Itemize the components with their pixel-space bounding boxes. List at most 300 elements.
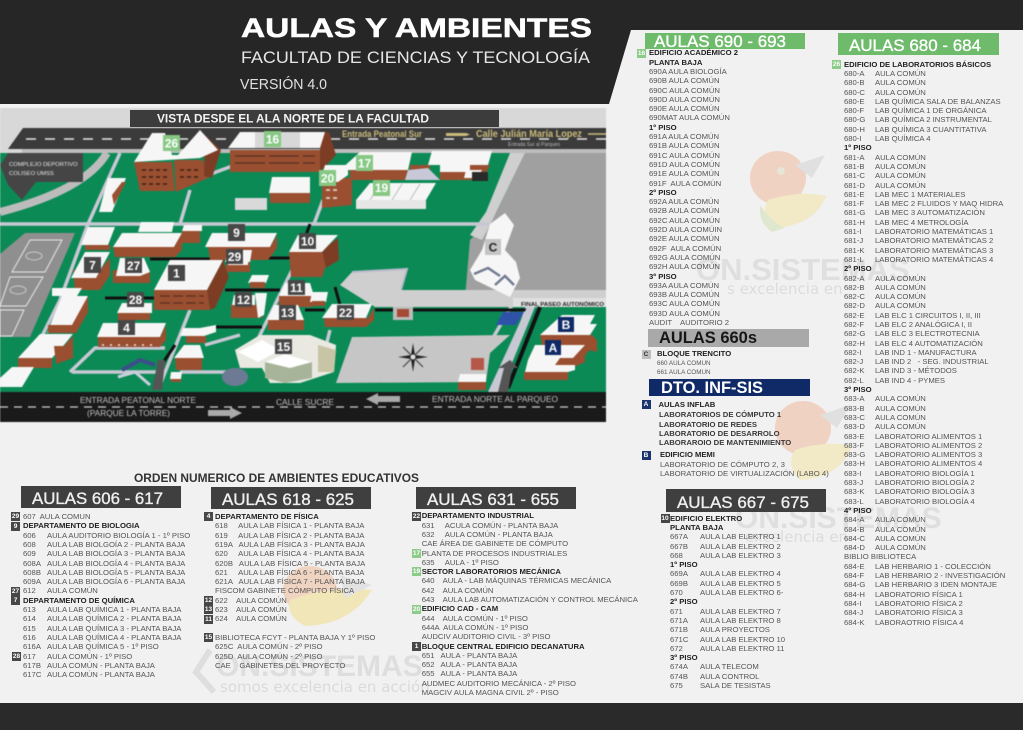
- list: aulas 690-693: 691C AULA COMÚN: [649, 151, 720, 160]
- list: aulas 667-675: 671C: [670, 635, 688, 644]
- list: aulas 618-625: 625C AULA COMÚN - 2º PISO: [215, 642, 322, 651]
- list: aulas 680-684: 681-E: [844, 190, 865, 199]
- header: aulas 631-655: AULAS 631 - 655: [427, 490, 559, 509]
- list: aulas 606-617: 609A: [23, 577, 41, 586]
- list: aulas 680-684: AULA COMÚN: [875, 422, 926, 431]
- badge 22: [412, 512, 421, 520]
- list: aulas 680-684: AULA COMÚN: [875, 171, 926, 180]
- list: aulas 680-684: 683-J: [844, 478, 863, 487]
- small pavilions: [235, 198, 267, 210]
- marker 20: 20: [321, 172, 334, 186]
- badge A: A: [644, 400, 648, 408]
- list: aulas 631-655: SECTOR LABORATORIOS MECÁNICA: [422, 567, 561, 576]
- list: aulas 680-684: [844, 60, 1005, 626]
- west buildings: [0, 288, 88, 387]
- list: aulas 680-684: LAB IND 1 - MANUFACTURA: [875, 348, 977, 357]
- list: aulas 680-684: LAB ELC 2 ANALÓGICA I, II: [875, 320, 972, 329]
- list: aulas 618-625: 624 AULA COMÚN: [215, 614, 287, 623]
- center low building: [269, 177, 310, 203]
- list: aulas 606-617: AULA LAB QUÍMICA 4 - PLANTA BAJA: [47, 633, 181, 642]
- small hut: [248, 275, 269, 288]
- list: aulas 680-684: 682-K: [844, 366, 865, 375]
- list: aulas 680-684: LABORATORIO BIOLOGÍA 3: [875, 487, 975, 496]
- list: aulas 680-684: LAB MEC 1 MATERIALES: [875, 190, 965, 199]
- list: aulas 660s: BLOQUE TRENCITO: [657, 349, 731, 358]
- list: aulas 680-684: 683-L: [844, 497, 864, 506]
- list: aulas 690-693: 3º PISO: [649, 272, 677, 281]
- marker 4: 4: [123, 321, 130, 335]
- marker B: [558, 317, 574, 332]
- list: aulas 680-684: AULA COMÚN: [875, 292, 926, 301]
- list: aulas 680-684: 681-J: [844, 236, 863, 245]
- list: aulas 606-617: AULA LAB BIOLOGÍA 3 - PLANTA BAJA: [47, 549, 185, 558]
- badge 17: 17: [413, 550, 420, 557]
- parking area: [465, 153, 606, 298]
- list: aulas 690-693: 691A AULA COMÚN: [649, 132, 719, 141]
- list: aulas 690-693: 693A AULA COMÚN: [649, 281, 719, 290]
- list: aulas 667-675: 670: [670, 588, 683, 597]
- list: aulas 680-684: AULA COMÚN: [875, 88, 926, 97]
- list: aulas 667-675: 667A: [670, 532, 688, 541]
- list: aulas 606-617: AULA COMÚN - PLANTA BAJA: [47, 670, 155, 679]
- list: aulas 680-684: AULA COMÚN: [875, 404, 926, 413]
- list: aulas 680-684: AULA COMÚN: [875, 274, 926, 283]
- road labels: ENTRADA PEATONAL NORTE: [80, 395, 196, 405]
- list: aulas 680-684: LABORATORIO ALIMENTOS 1: [875, 432, 982, 441]
- compass: [398, 343, 428, 372]
- list: aulas 618-625: 619 AULA LAB FÍSICA 2 - PLANTA BAJA: [215, 531, 364, 540]
- badge C: [642, 350, 650, 358]
- list: aulas 680-684: 2º PISO: [844, 264, 872, 273]
- list: aulas 631-655: MAGCIV AULA MAGNA CIVIL 2º - PISO: [422, 688, 559, 697]
- list: aulas 680-684: LABORATORIO FÍSICA 1: [875, 590, 963, 599]
- list: aulas 690-693: 691F AULA COMÚN: [649, 179, 721, 188]
- watermark: brand bottom: ON.SISTEMAS: [216, 650, 423, 683]
- list: aulas 690-693: 690D AULA COMÚN: [649, 95, 720, 104]
- building row north: [81, 222, 202, 257]
- badge 9: 9: [14, 522, 17, 530]
- top road labels: [342, 128, 606, 148]
- list: laboratorios inflab: LABORATORIO DE DESARROLO: [659, 429, 780, 438]
- marker 26: [163, 135, 180, 151]
- list: aulas 690-693: 2º PISO: [649, 188, 677, 197]
- list: aulas 618-625: 621 AULA LAB FÍSICA 6 - PLANTA BAJA: [215, 568, 364, 577]
- arrow sign: complejo deportivo: COMPLEJO DEPORTIVO: [9, 162, 78, 168]
- badge 19: [412, 567, 421, 576]
- marker 26: 26: [165, 136, 178, 150]
- list: aulas 680-684: 684-A: [844, 515, 865, 524]
- list: aulas 631-655: 631 ACULA COMÚN - PLANTA BAJA: [422, 521, 558, 530]
- list: aulas 680-684: LAB IND 4 - PYMES: [875, 376, 945, 385]
- list: aulas 606-617: AULA COMÚN - PLANTA BAJA: [47, 661, 155, 670]
- arrow sign: complejo deportivo: [0, 153, 83, 200]
- list: aulas 606-617: 609: [23, 549, 36, 558]
- list: aulas 660s: [657, 349, 731, 376]
- marker C: C: [489, 240, 498, 254]
- list: aulas 690-693: 691B AULA COMÚN: [649, 141, 720, 150]
- badge 16: 16: [638, 50, 645, 56]
- list: aulas inflab: AULAS INFLAB: [658, 400, 715, 409]
- marker 11: 11: [290, 281, 303, 295]
- list: aulas 606-617: AULA LAB BIOLOGÍA 6 - PLANTA BAJA: [47, 577, 185, 586]
- list: aulas 667-675: AULA CONTROL: [700, 672, 759, 681]
- list: aulas 680-684: AULA COMÚN: [875, 153, 926, 162]
- list: aulas 631-655: 652 AULA - PLANTA BAJA: [422, 660, 517, 669]
- list: aulas 680-684: 684-F: [844, 571, 864, 580]
- list: aulas 631-655: 643 AULA LAB AUTOMATIZACIÓN Y CONTROL MECÁNICA: [422, 595, 638, 604]
- list: aulas 667-675: 667B: [670, 542, 688, 551]
- list: aulas 680-684: 683-G: [844, 450, 865, 459]
- sports courts: [0, 233, 75, 337]
- bottom road: [0, 392, 606, 422]
- marker 1: 1: [173, 266, 180, 280]
- badge 12: 12: [205, 597, 212, 604]
- list: aulas 690-693: PLANTA BAJA: [649, 58, 702, 67]
- marker 16: 16: [266, 132, 279, 146]
- list: aulas 667-675: AULA LAB ELEKTRO 10: [700, 635, 785, 644]
- list: aulas 667-675: PLANTA BAJA: [670, 523, 723, 532]
- header: aulas 606-617: AULAS 606 - 617: [32, 489, 163, 508]
- list: aulas 631-655: 644 AULA COMÚN - 1º PISO: [422, 614, 528, 623]
- list: aulas 631-655: CAE ÁREA DE GABINETE DE CÓMPUTO: [422, 539, 568, 548]
- marker 15: 15: [277, 340, 290, 354]
- list: aulas 680-684: 683-D: [844, 422, 865, 431]
- list: aulas 631-655: EDIFICIO CAD - CAM: [422, 604, 498, 613]
- list: aulas 631-655: 640 AULA - LAB MÁQUINAS TÉRMICAS MECÁNICA: [422, 576, 611, 585]
- badge 22: 22: [413, 512, 420, 520]
- list: aulas 667-675: 675: [670, 681, 683, 690]
- list: aulas 606-617: 612: [23, 586, 36, 595]
- list: aulas 680-684: AULA COMÚN: [875, 162, 926, 171]
- list: aulas 680-684: 682-I: [844, 348, 862, 357]
- list: aulas 680-684: LABORATORIO MATEMÁTICAS 3: [875, 246, 993, 255]
- list: aulas 680-684: LABORATORIO ALIMENTOS 4: [875, 459, 982, 468]
- list: aulas 631-655: BLOQUE CENTRAL EDIFICIO DECANATURA: [422, 642, 585, 651]
- badge B: [642, 450, 650, 460]
- list: aulas 680-684: LABORATORIO BIOLOGÍA 4: [875, 497, 975, 506]
- list: aulas 667-675: 669A: [670, 569, 688, 578]
- list: aulas 680-684: 1º PISO: [844, 143, 872, 152]
- road arrow right: [208, 407, 242, 419]
- road labels: ENTRADA NORTE AL PARQUEO: [432, 394, 558, 404]
- list: aulas 690-693: 692G AULA COMÚN: [649, 253, 720, 262]
- badge 28: [12, 652, 21, 661]
- list: aulas 690-693: 692A AULA COMÚN: [649, 197, 719, 206]
- list: aulas 680-684: LABORATORIO FÍSICA 2: [875, 599, 963, 608]
- badge 20: 20: [413, 606, 420, 612]
- marker 7: [84, 257, 101, 273]
- list: aulas 680-684: 3º PISO: [844, 385, 872, 394]
- list: aulas 680-684: LABORATORIO BIOLOGÍA 2: [875, 478, 975, 487]
- list: aulas 680-684: 680-A: [844, 69, 865, 78]
- list: aulas 680-684: 681-K: [844, 246, 865, 255]
- building 29: [225, 250, 252, 272]
- list: aulas 667-675: 2º PISO: [670, 597, 698, 606]
- badge 27: [11, 587, 20, 596]
- list: aulas 680-684: LAB QUÍMICA 2 INSTRUMENTAL: [875, 115, 992, 124]
- list: aulas 606-617: 614: [23, 614, 36, 623]
- badge 26: [832, 60, 841, 69]
- list: edificio memi: [660, 450, 829, 478]
- marker 16: [264, 131, 281, 147]
- small south-east buildings: [458, 358, 486, 390]
- badge 16: [637, 48, 646, 58]
- top road labels: Entrada Peatonal Sur: [342, 129, 423, 139]
- list: aulas 680-684: 681-I: [844, 227, 862, 236]
- list: aulas 606-617: 617C: [23, 670, 41, 679]
- arrow sign: complejo deportivo: COLISEO UMSS: [9, 171, 54, 177]
- list: aulas 680-684: AULA COMÚN: [875, 413, 926, 422]
- badge C: C: [644, 350, 648, 358]
- heading: orden numerico: ORDEN NUMERICO DE AMBIENTES EDUCATIVOS: [134, 473, 419, 485]
- header: aulas 618-625: AULAS 618 - 625: [222, 490, 354, 509]
- list: laboratorios inflab: LABORATORIOS DE CÓMPUTO 1: [659, 410, 781, 419]
- list: aulas 680-684: 683-F: [844, 441, 864, 450]
- list: aulas 680-684: 683-B: [844, 404, 865, 413]
- list: aulas 680-684: 682-F: [844, 320, 864, 329]
- list: aulas 680-684: 681-B: [844, 162, 865, 171]
- list: aulas 680-684: 682-C: [844, 292, 865, 301]
- badge 9: [11, 522, 20, 530]
- badge 4: 4: [207, 513, 210, 520]
- list: aulas 631-655: 655 AULA - PLANTA BAJA: [422, 669, 517, 678]
- version: VERSIÓN 4.0: [240, 76, 327, 93]
- list: aulas 680-684: 682-J: [844, 357, 863, 366]
- list: aulas 680-684: AULA COMÚN: [875, 525, 926, 534]
- marker 9: [228, 224, 245, 241]
- header: dto inf-sis: [649, 378, 810, 397]
- list: aulas 690-693: 691E AULA COMÚN: [649, 169, 720, 178]
- list: aulas 606-617: 608: [23, 540, 36, 549]
- list: aulas 680-684: LABORAOTRIO FÍSICA 4: [875, 618, 963, 626]
- building 9: [205, 233, 277, 260]
- badge 19: 19: [413, 568, 420, 575]
- marker 12: 12: [237, 293, 250, 307]
- list: aulas 680-684: LAB ELC 1 CIRCUITOS I, II, III: [875, 311, 981, 320]
- list: aulas 606-617: 615: [23, 624, 36, 633]
- footer band: [0, 703, 1023, 730]
- list: aulas 667-675: AULA LAB ELEKTRO 3: [700, 551, 781, 560]
- list: aulas 680-684: 4º PISO: [844, 506, 872, 515]
- list: aulas 680-684: LABORATORIO ALIMENTOS 2: [875, 441, 982, 450]
- list: aulas 680-684: 680-B: [844, 78, 865, 87]
- list: aulas 680-684: 683-A: [844, 394, 865, 403]
- list: aulas 680-684: AULA COMÚN: [875, 283, 926, 292]
- list: aulas 618-625: CAE GABINETES DEL PROYECTO: [215, 661, 345, 670]
- list: aulas 680-684: 680-C: [844, 88, 865, 97]
- building 13: [267, 305, 304, 330]
- list: aulas 680-684: AULA COMÚN: [875, 543, 926, 552]
- list: aulas 680-684: 681-F: [844, 199, 864, 208]
- small building left: [99, 178, 126, 212]
- list: aulas 680-684: LAB QUÍMICA SALA DE BALANZAS: [875, 97, 1001, 106]
- building 17 complex: [340, 151, 492, 181]
- list: aulas 667-675: 671: [670, 607, 683, 616]
- list: aulas 680-684: 684-K: [844, 618, 865, 626]
- list: aulas 680-684: LAB QUÍMICA 4: [875, 134, 931, 143]
- list: aulas 680-684: 680-G: [844, 115, 865, 124]
- list: aulas 680-684: 684-D: [844, 543, 865, 552]
- badge 12: [204, 596, 213, 605]
- list: aulas 690-693: EDIFICIO ACADÉMICO 2: [649, 48, 738, 57]
- north entrance arrow: [498, 360, 518, 392]
- badge 13: [204, 605, 213, 614]
- list: aulas 680-684: 682-H: [844, 339, 865, 348]
- list: aulas 606-617: AULA AUDITORIO BIOLOGÍA 1 - 1º PISO: [47, 531, 190, 540]
- list: aulas 618-625: 623 AULA COMÚN: [215, 605, 287, 614]
- list: aulas 690-693: 690A AULA BIOLOGÍA: [649, 67, 727, 76]
- list: aulas 606-617: AULA LAB QUÍMICA 3 - PLANTA BAJA: [47, 624, 181, 633]
- list: aulas 660s: 660 AULA COMUN: [657, 360, 711, 367]
- list: aulas 606-617: 608B: [23, 568, 41, 577]
- list: aulas 667-675: AULA LAB ELEKTRO 4: [700, 569, 781, 578]
- list: aulas 680-684: 680-E: [844, 97, 865, 106]
- badge 1: 1: [415, 643, 418, 650]
- marker 17: [356, 155, 373, 171]
- list: aulas 680-684: LABORATORIO ALIMENTOS 3: [875, 450, 982, 459]
- list: aulas 690-693: 690MAT AULA COMÚN: [649, 113, 730, 122]
- building 27: [113, 258, 150, 283]
- list: aulas 606-617: AULA LAB BIOLGOÍA 2 - PLANTA BAJA: [47, 540, 185, 549]
- list: aulas 690-693: [649, 48, 738, 327]
- list: aulas 631-655: PLANTA DE PROCESOS INDUSTRIALES: [422, 549, 567, 558]
- marker 28: 28: [129, 293, 142, 307]
- marker 19: 19: [375, 181, 388, 195]
- list: aulas 618-625: 620 AULA LAB FÍSICA 4 - PLANTA BAJA: [215, 549, 364, 558]
- list: aulas 680-684: LAB QUÍMICA 1 DE ORGÁNICA: [875, 106, 986, 115]
- list: aulas 680-684: AULA COMÚN: [875, 301, 926, 310]
- list: aulas 680-684: 683-H: [844, 459, 865, 468]
- building 7: [71, 252, 110, 290]
- list: aulas 631-655: 644A AULA COMÚN - 1º PISO: [422, 623, 528, 632]
- list: aulas 618-625: 625D AULA COMÚN - 2º PISO: [215, 652, 322, 661]
- top road: [8, 128, 606, 153]
- list: aulas 606-617: 608A: [23, 559, 41, 568]
- list: aulas 680-684: LABORATORIO BIOLOGÍA 1: [875, 469, 975, 478]
- list: aulas 667-675: 1º PISO: [670, 560, 698, 569]
- list: aulas 667-675: EDIFICIO ELEKTRO: [670, 514, 742, 523]
- list: aulas 631-655: 642 AULA COMÚN: [422, 586, 493, 595]
- list: aulas 680-684: 682-E: [844, 311, 865, 320]
- list: edificio memi: LABORATORIO DE VIRTUALIZACIÓN (LABO 4): [660, 469, 829, 478]
- badge 15: 15: [205, 634, 212, 641]
- badge 29: 29: [12, 513, 19, 520]
- top road labels: Calle Julián María Lopez: [476, 128, 582, 140]
- list: aulas 667-675: AULA PROYECTOS: [700, 625, 770, 634]
- list: aulas 690-693: 692F AULA COMÚN: [649, 244, 721, 253]
- list: aulas 667-675: 671B: [670, 625, 688, 634]
- list: aulas 606-617: DEPARTAMENTO DE QUÍMICA: [23, 596, 135, 605]
- marker C: [485, 239, 501, 255]
- list: aulas 606-617: 616A: [23, 642, 41, 651]
- list: aulas 606-617: AULA LAB QUÍMICA 2 - PLANTA BAJA: [47, 614, 181, 623]
- list: aulas 690-693: 692D AULA COMÚIN: [649, 225, 722, 234]
- list: aulas 606-617: 607 AULA COMUN: [23, 512, 91, 521]
- list: aulas 618-625: 619A AULA LAB FÍSICA 3 - PLANTA BAJA: [215, 540, 365, 549]
- list: laboratorios inflab: LABORAROIO DE MANTENIMIENTO: [659, 438, 791, 447]
- list: aulas 680-684: 682-G: [844, 329, 865, 338]
- list: aulas 680-684: 681-D: [844, 181, 865, 190]
- list: aulas 606-617: [23, 512, 190, 679]
- list: aulas 680-684: AULA COMÚN: [875, 69, 926, 78]
- list: aulas 690-693: 693B AULA COMÚN: [649, 290, 720, 299]
- badge 17: [412, 549, 421, 558]
- list: aulas 606-617: 606: [23, 531, 36, 540]
- list: aulas 680-684: AULA COMÚN: [875, 534, 926, 543]
- badge 29: [11, 512, 20, 521]
- list: aulas 680-684: LABORATORIO MATEMÁTICAS 4: [875, 255, 993, 264]
- list: aulas 690-693: 690C AULA COMÚN: [649, 86, 720, 95]
- marker 17: 17: [358, 156, 371, 170]
- list: aulas 690-693: 1º PISO: [649, 123, 677, 132]
- list: aulas 660s: 661 AULA COMUN: [657, 369, 711, 376]
- list: aulas 606-617: DEPARTAMENTO DE BIOLOGIA: [23, 521, 140, 530]
- list: aulas 680-684: 683-K: [844, 487, 865, 496]
- list: aulas 680-684: AULA COMÚN: [875, 181, 926, 190]
- list: aulas 680-684: LAB HERBARIO 2 - INVESTIGACIÓN: [875, 571, 1005, 580]
- small red building: [393, 307, 413, 320]
- campus map: [0, 108, 606, 422]
- list: aulas 680-684: 684-B: [844, 525, 865, 534]
- list: aulas 680-684: LAB ELC 3 ELECTROTECNIA: [875, 329, 980, 338]
- badge 7: [11, 596, 20, 605]
- marker 7: 7: [89, 258, 96, 272]
- list: aulas 631-655: 632 AULA COMÚN - PLANTA BAJA: [422, 530, 553, 539]
- list: aulas 680-684: 682-A: [844, 274, 865, 283]
- bottom-right green base: [510, 307, 606, 392]
- marker A: A: [549, 341, 558, 355]
- badge A: [642, 400, 650, 408]
- list: aulas 680-684: LAB HERBARIO 1 - COLECCIÓN: [875, 562, 991, 571]
- list: aulas 680-684: LABORATORIO FÍSICA 3: [875, 608, 963, 617]
- list: aulas 667-675: 669B: [670, 579, 688, 588]
- header: dto inf-sis: DTO. INF-SIS: [661, 378, 763, 397]
- map heading bar: [130, 110, 499, 127]
- building 28: [117, 303, 152, 320]
- list: aulas 690-693: AUDIT AUDITORIO 2: [649, 318, 729, 327]
- badge 20: [412, 604, 421, 614]
- list: aulas 680-684: AULA COMÚN: [875, 394, 926, 403]
- list: aulas 606-617: AULA COMÚN - 1º PISO: [47, 652, 132, 661]
- list: aulas 680-684: LABORATORIO MATEMÁTICAS 2: [875, 236, 993, 245]
- badge B: B: [644, 452, 648, 458]
- list: aulas 606-617: AULA LAB BIOLOGÍA 5 - PLANTA BAJA: [47, 568, 185, 577]
- watermark: brand bottom: somos excelencia en acción: [220, 678, 430, 696]
- list: aulas 631-655: 635 AULA - 1º PISO: [422, 558, 499, 567]
- badge 4: [204, 512, 213, 521]
- building 15 library: [235, 335, 336, 383]
- list: aulas 667-675: AULA LAB ELEKTRO 8: [700, 616, 781, 625]
- road labels: (PARQUE LA TORRE): [87, 408, 170, 418]
- list: aulas 680-684: AULA COMÚN: [875, 78, 926, 87]
- marker 22: 22: [339, 306, 352, 320]
- south small buildings: [170, 325, 216, 382]
- list: aulas 618-625: 618 AULA LAB FÍSICA 1 - PLANTA BAJA: [215, 521, 364, 530]
- building A: [524, 345, 585, 380]
- road labels: [80, 394, 558, 418]
- list: edificio memi: LABORATORIO DE CÓMPUTO 2, 3: [660, 460, 785, 469]
- list: aulas 667-675: 674A: [670, 662, 688, 671]
- marker 4: [118, 320, 135, 335]
- list: aulas 631-655: 651 AULA - PLANTA BAJA: [422, 651, 517, 660]
- list: aulas 680-684: EDIFICIO DE LABORATORIOS BÁSICOS: [844, 60, 991, 69]
- list: aulas 690-693: 692B AULA COMÚN: [649, 206, 720, 215]
- dome: [222, 368, 248, 386]
- header: aulas 660s: [648, 329, 809, 347]
- list: aulas 618-625: FISCOM GABINETE CÓMPUTO FÍSICA: [215, 586, 354, 595]
- building 26: [134, 130, 221, 192]
- list: aulas 680-684: 680-I: [844, 134, 862, 143]
